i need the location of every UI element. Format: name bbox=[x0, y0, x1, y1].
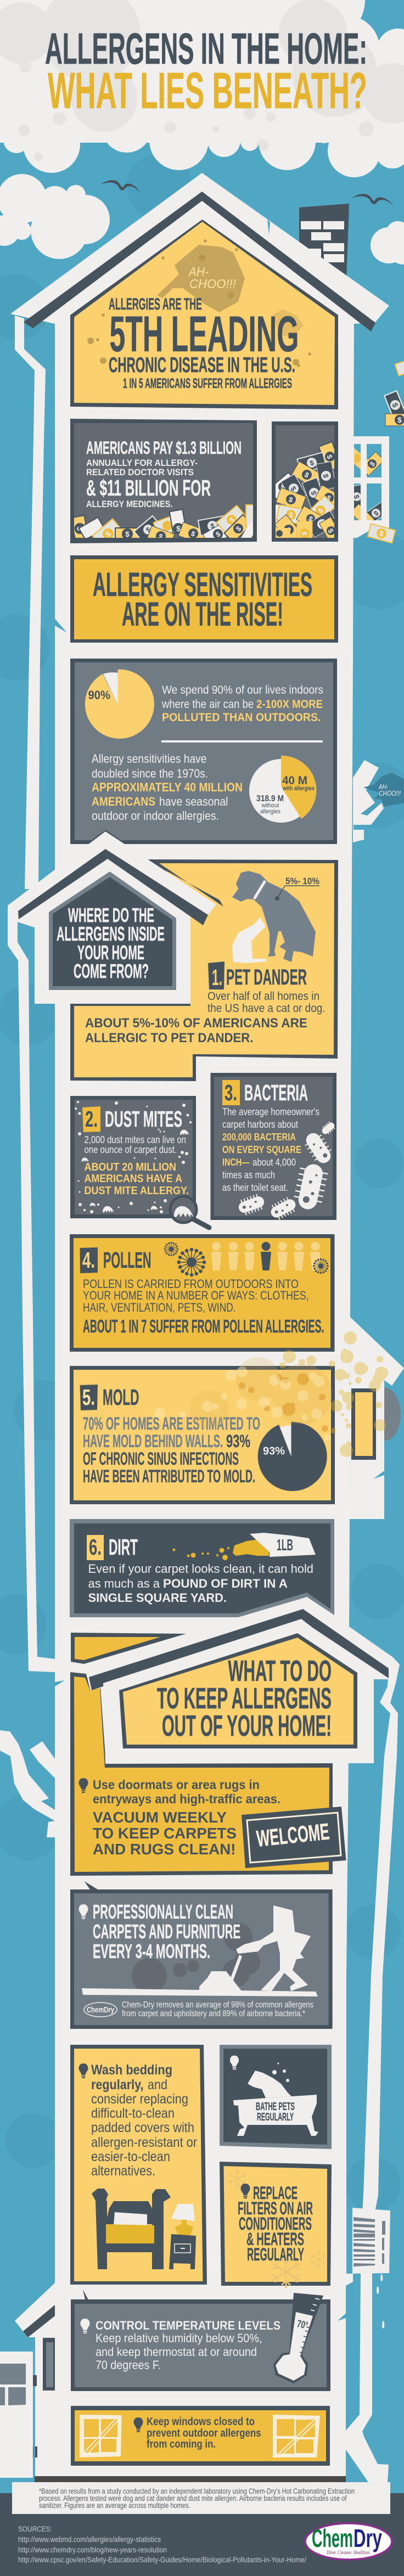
sensitivities text: have seasonal bbox=[159, 795, 228, 808]
icon: welcome mat: WELCOME bbox=[255, 1818, 330, 1852]
footnote card bbox=[12, 2482, 390, 2514]
pie: 93 percent: 93% bbox=[263, 1446, 285, 1458]
cleaning heading: EVERY 3-4 MONTHS. bbox=[93, 1940, 210, 1962]
sources list: http://www.cpsc.gov/en/Safety-Education/Safety-Guides/Home/Biological-Pollutants-in-Your-Home/ bbox=[18, 2555, 306, 2564]
lower left annex bbox=[0, 2283, 55, 2478]
bedding text: easier-to-clean bbox=[91, 2149, 170, 2164]
annex window bbox=[0, 2352, 37, 2478]
logo: chem-dry bbox=[305, 2523, 392, 2560]
house outline: left strip lower bbox=[8, 905, 55, 1672]
footer band bbox=[0, 2493, 404, 2576]
chem-dry claim: from carpet and upholstery and 89% of airborne bacteria.* bbox=[122, 2009, 305, 2018]
icon: dirt bag: 1LB bbox=[277, 1537, 293, 1554]
icon: lightbulb bbox=[79, 1778, 88, 1793]
bacteria text bbox=[222, 1106, 319, 1193]
sneeze text bbox=[188, 265, 237, 291]
bathe pets label bbox=[256, 2101, 295, 2123]
sensitivities text: outdoor or indoor allergies. bbox=[92, 809, 219, 823]
doormat text bbox=[93, 1778, 280, 1858]
mite icons bbox=[82, 1130, 189, 1213]
sources list: SOURCES: bbox=[18, 2524, 52, 2533]
filters text: REPLACE bbox=[253, 2183, 298, 2203]
house foundation bbox=[35, 2476, 346, 2483]
icon: lightbulb bbox=[79, 1904, 88, 1919]
mold text bbox=[83, 1414, 260, 1486]
mold text: OF CHRONIC SINUS INFECTIONS bbox=[83, 1449, 239, 1469]
mini house text: WHERE DO THE bbox=[68, 904, 154, 926]
house outline: what to do roof white bbox=[55, 1597, 393, 1763]
dust mites text: AMERICANS HAVE A bbox=[85, 1173, 182, 1185]
panel: pollen bbox=[70, 1234, 335, 1352]
mini house: where do the allergens bbox=[8, 831, 216, 1004]
windows text bbox=[147, 2416, 261, 2450]
people icons: 1 in 7 bbox=[211, 1242, 321, 1270]
icon: window left bbox=[80, 2415, 122, 2457]
panel: money pile: $ bbox=[284, 526, 293, 534]
bathe pets label: REGULARLY bbox=[257, 2111, 294, 2123]
money pile: $ bbox=[158, 532, 165, 541]
badge: number 2: 2. bbox=[85, 1106, 98, 1132]
filters text: REGULARLY bbox=[247, 2245, 304, 2264]
blue spike by mold window bbox=[373, 1471, 384, 1479]
panel: money pile: $ bbox=[288, 495, 295, 504]
icon: lightbulb bbox=[230, 2056, 239, 2069]
sneezing arm bbox=[353, 760, 404, 842]
panel: bathe pets bbox=[220, 2045, 332, 2149]
window with escaping money: $ bbox=[368, 459, 377, 468]
dirt text: as much as a bbox=[88, 1577, 160, 1590]
bacteria text: 200,000 BACTERIA bbox=[222, 1132, 296, 1143]
panel: money pile: $ bbox=[288, 510, 294, 520]
dust mites text: 2,000 dust mites can live on bbox=[85, 1134, 186, 1145]
dust mites text: one ounce of carpet dust. bbox=[85, 1144, 177, 1155]
mold text: HAVE BEEN ATTRIBUTED TO MOLD. bbox=[83, 1466, 255, 1486]
mini house: what to do bbox=[89, 1609, 389, 1763]
badge: number 5: 5. bbox=[82, 1385, 95, 1410]
headline text bbox=[109, 295, 299, 391]
badge: number 6: 6. bbox=[89, 1534, 102, 1560]
flying bills: $ bbox=[397, 415, 402, 424]
icon: lightbulb bbox=[80, 2319, 90, 2333]
dust mites text bbox=[85, 1134, 189, 1197]
heading: mold: MOLD bbox=[103, 1385, 139, 1410]
doormat text: VACUUM WEEKLY bbox=[93, 1809, 227, 1826]
cloud: top banner bbox=[0, 0, 404, 177]
logo: chem-dry small: ChemDry bbox=[87, 2005, 114, 2015]
bacteria text: INCH— bbox=[222, 1157, 249, 1168]
bedding text: and bbox=[148, 2077, 167, 2093]
panel: 5th leading gable bbox=[70, 220, 338, 409]
flying bills: $ bbox=[378, 528, 385, 538]
sources list: http://www.webmd.com/allergies/allergy-statistics bbox=[18, 2535, 161, 2544]
money pile: $ bbox=[104, 529, 113, 539]
dirt text bbox=[88, 1562, 313, 1605]
window with escaping money: $ bbox=[352, 494, 361, 500]
pollen spores bbox=[164, 1242, 206, 1276]
panel: mold bbox=[70, 1366, 335, 1504]
mini house text: ALLERGENS INSIDE bbox=[57, 923, 165, 945]
mini house text: COME FROM? bbox=[74, 960, 149, 982]
icon: dirt bag bbox=[250, 1533, 316, 1557]
blue spike by temperature panel bbox=[338, 2313, 346, 2321]
mini roof band bbox=[18, 849, 208, 925]
bedding text: Wash bedding bbox=[91, 2062, 172, 2078]
icon: bath bubbles bbox=[272, 2062, 289, 2082]
panel: bacteria bbox=[211, 1073, 336, 1220]
annex roof band bbox=[23, 2305, 55, 2337]
filters text bbox=[238, 2183, 313, 2264]
pet dander text: the US have a cat or dog. bbox=[207, 1002, 325, 1015]
panel: money pile: $ bbox=[325, 453, 334, 460]
icon: lightbulb bbox=[240, 2184, 250, 2198]
indoor pollution text: We spend 90% of our lives indoors bbox=[162, 683, 323, 696]
indoor pollution text: where the air can be bbox=[161, 698, 254, 711]
pie: 90 percent bbox=[85, 670, 154, 739]
dust mites text: DUST MITE ALLERGY. bbox=[85, 1185, 189, 1197]
pie: 90 percent: 90% bbox=[88, 688, 110, 702]
mold text: 70% OF HOMES ARE ESTIMATED TO bbox=[83, 1414, 260, 1433]
heading: dirt: DIRT bbox=[109, 1534, 138, 1560]
panel: pet dander bbox=[70, 859, 338, 1081]
house outline: right strip bbox=[362, 1657, 400, 2212]
chimney bbox=[299, 204, 349, 280]
panel: money pile: $ bbox=[321, 473, 330, 479]
badge: number 4: 4. bbox=[82, 1247, 95, 1273]
temperature text bbox=[96, 2319, 280, 2372]
pollen spore small bbox=[313, 1258, 329, 1274]
cloud shading bbox=[0, 0, 404, 161]
panel: keep windows closed bbox=[71, 2406, 330, 2466]
pollen text: YOUR HOME IN A NUMBER OF WAYS: CLOTHES, bbox=[83, 1289, 308, 1302]
sensitivities text: Allergy sensitivities have bbox=[92, 752, 206, 766]
logo: chem-dry small bbox=[84, 2003, 117, 2017]
mold spores bbox=[154, 1331, 388, 1457]
bacteria text: about 4,000 bbox=[252, 1157, 296, 1168]
cost text: ANNUALLY FOR ALLERGY- bbox=[86, 458, 198, 468]
small splat bbox=[273, 309, 304, 338]
badge: number 3: 3. bbox=[225, 1080, 237, 1105]
pet dander text bbox=[85, 989, 325, 1045]
cost text bbox=[86, 438, 242, 509]
splat dots bbox=[87, 239, 311, 367]
badge: number 6 bbox=[87, 1534, 104, 1560]
annex door bbox=[43, 2338, 55, 2391]
house body bbox=[55, 316, 354, 2478]
panel: money pile: $ bbox=[307, 514, 315, 524]
panel: money pile: $ bbox=[289, 485, 298, 493]
icon: lightbulb bbox=[79, 2063, 88, 2078]
sneeze text: AH- bbox=[188, 265, 209, 279]
pet dander text: ALLERGIC TO PET DANDER. bbox=[85, 1031, 254, 1045]
mini house text: YOUR HOME bbox=[77, 941, 144, 964]
panel: replace filters bbox=[220, 2162, 332, 2288]
money pile: $ bbox=[210, 521, 216, 531]
bedding text: alternatives. bbox=[91, 2163, 155, 2179]
panel: indoor air statistics bbox=[70, 659, 337, 844]
pie: 93 percent bbox=[258, 1422, 327, 1491]
cost text: ALLERGY MEDICINES. bbox=[86, 499, 172, 509]
cloud: right bbox=[371, 221, 404, 265]
money pile: $ bbox=[214, 530, 222, 539]
house outline: left strip upper bbox=[15, 316, 46, 889]
badge: number 1 bbox=[208, 961, 225, 990]
doormat text: AND RUGS CLEAN! bbox=[93, 1841, 236, 1858]
panel: money pile bbox=[272, 421, 338, 542]
filters text: & HEATERS bbox=[246, 2229, 304, 2249]
birds bbox=[100, 180, 394, 207]
money pile: $ bbox=[190, 529, 197, 538]
bedding text: padded covers with bbox=[91, 2120, 194, 2135]
bedding text bbox=[91, 2062, 197, 2179]
mini house plate bbox=[119, 1633, 357, 1748]
mold text: 93% bbox=[226, 1431, 250, 1451]
panel: dust mites bbox=[70, 1096, 196, 1218]
house outline: left ribbon bbox=[0, 1730, 55, 1837]
filters text: CONDITIONERS bbox=[239, 2214, 312, 2234]
panel: money pile: $ bbox=[325, 493, 333, 503]
bacteria icons bbox=[237, 1121, 336, 1219]
panel: money pile: $ bbox=[318, 520, 327, 529]
logo: chem-dry: Chem bbox=[312, 2524, 353, 2552]
panel: money pile: $ bbox=[309, 458, 315, 468]
panel: dirt bbox=[70, 1519, 334, 1617]
bedding text: consider replacing bbox=[91, 2091, 188, 2107]
window with escaping money bbox=[354, 436, 389, 538]
temperature text: and keep thermostat at or around bbox=[96, 2345, 257, 2359]
icon: dog in tub bbox=[233, 2071, 318, 2136]
sensitivities text bbox=[92, 752, 243, 823]
icon: lightbulb bbox=[134, 2417, 143, 2432]
money pile: $ bbox=[75, 526, 85, 531]
cloud: left bbox=[0, 174, 110, 259]
pie: 40 million: allergies bbox=[260, 808, 280, 815]
money pile: $ bbox=[176, 524, 181, 533]
chem-dry claim: Chem-Dry removes an average of 98% of common allergens bbox=[122, 2000, 313, 2010]
pie: 40 million: with allergies bbox=[282, 785, 315, 792]
pie: 40 million: 318.9 M bbox=[256, 794, 284, 803]
window with escaping money: $ bbox=[372, 509, 380, 518]
dirt text: SINGLE SQUARE YARD. bbox=[88, 1591, 227, 1605]
cleaning heading: PROFESSIONALLY CLEAN bbox=[93, 1900, 233, 1923]
gray oval behind mold window bbox=[370, 1388, 401, 1441]
dog collar bbox=[254, 881, 265, 899]
cost text: AMERICANS PAY $1.3 BILLION bbox=[86, 438, 242, 458]
panel: wash bedding bbox=[70, 2045, 207, 2285]
indoor pollution text: 2-100X MORE bbox=[256, 698, 323, 711]
indoor pollution text: POLLUTED THAN OUTDOORS. bbox=[162, 711, 321, 724]
house body upper side blue spike bbox=[54, 617, 67, 633]
pie: 40 million: without bbox=[261, 802, 279, 809]
doormat text: TO KEEP CARPETS bbox=[93, 1825, 237, 1842]
money pile: $ bbox=[125, 530, 130, 538]
money pile: $ bbox=[144, 525, 153, 534]
icon: thermometer: 70° bbox=[296, 2318, 309, 2332]
roof crack bbox=[267, 220, 270, 235]
cost text: RELATED DOCTOR VISITS bbox=[86, 468, 194, 477]
panel: money pile: $ bbox=[300, 531, 308, 536]
heading: dust mites: DUST MITES bbox=[105, 1106, 182, 1132]
bedding text: difficult-to-clean bbox=[91, 2106, 175, 2121]
logo: chem-dry: Dry bbox=[354, 2524, 382, 2552]
headline text: ALLERGIES ARE THE bbox=[109, 295, 202, 313]
pie: 40 million: 40 M bbox=[282, 774, 307, 787]
sneeze text bbox=[378, 783, 401, 797]
roof dark band bbox=[24, 192, 375, 331]
illustration: man with vacuum bbox=[82, 1905, 318, 1996]
sneeze splat bbox=[157, 245, 245, 312]
sensitivities text: APPROXIMATELY 40 MILLION bbox=[92, 780, 243, 794]
dirt text: POUND OF DIRT IN A bbox=[163, 1577, 288, 1590]
pollen text bbox=[83, 1277, 324, 1336]
bacteria text: The average homeowner's bbox=[222, 1106, 319, 1117]
dirt text: Even if your carpet looks clean, it can hold bbox=[88, 1562, 313, 1576]
sneeze text: AH- bbox=[378, 783, 389, 791]
heading: pollen: POLLEN bbox=[103, 1247, 152, 1273]
windows text: Keep windows closed to bbox=[147, 2416, 255, 2428]
chem-dry claim bbox=[122, 2000, 313, 2018]
sources list: http://www.chemdry.com/blog/new-years-resolution bbox=[18, 2545, 167, 2554]
doormat text: entryways and high-traffic areas. bbox=[93, 1792, 280, 1806]
icon: cat bbox=[232, 918, 267, 963]
sneeze text: CHOO!!! bbox=[189, 277, 237, 291]
notch gable on stats panel bbox=[92, 830, 121, 844]
bedding text: allergen-resistant or bbox=[91, 2135, 197, 2150]
filters text: FILTERS ON AIR bbox=[238, 2198, 313, 2218]
panel: cost of allergies bbox=[70, 419, 258, 549]
pie: 40 million bbox=[249, 756, 316, 823]
snowflake icons bbox=[228, 2169, 326, 2288]
footnote card: sanitizer. Figures are an average across multiple homes. bbox=[39, 2501, 190, 2510]
blue spike near mini house bbox=[55, 1680, 65, 1686]
roof band top right bbox=[145, 859, 223, 907]
icon: magnifier bbox=[170, 1196, 209, 1228]
bedding text: regularly, bbox=[91, 2077, 144, 2093]
dark blotches bbox=[132, 1923, 260, 1993]
bacteria text: as their toilet seat. bbox=[222, 1182, 288, 1193]
pollen text: POLLEN IS CARRIED FROM OUTDOORS INTO bbox=[83, 1277, 299, 1291]
panel: professional cleaning bbox=[70, 1881, 333, 2029]
badge: number 1: 1. bbox=[212, 965, 222, 990]
heading: bacteria: BACTERIA bbox=[244, 1080, 308, 1105]
pet dander text: Over half of all homes in bbox=[207, 989, 319, 1003]
icon: welcome mat bbox=[242, 1807, 346, 1868]
flying bills: $ bbox=[390, 401, 400, 409]
icon: nightstand lamp bbox=[169, 2204, 196, 2269]
window: mold side bbox=[351, 1388, 376, 1460]
pet allergy label: 5%- 10% bbox=[285, 876, 319, 886]
bacteria text: carpet harbors about bbox=[222, 1119, 298, 1130]
temperature text: 70 degrees F. bbox=[96, 2358, 161, 2372]
panel: control temperature bbox=[71, 2290, 330, 2391]
bacteria text: ON EVERY SQUARE bbox=[222, 1144, 301, 1155]
panel: allergy sensitivities banner bbox=[70, 555, 338, 643]
icon: thermometer bbox=[273, 2293, 323, 2383]
sources list bbox=[18, 2524, 306, 2564]
windows text: from coming in. bbox=[147, 2438, 216, 2450]
panel: doormats bbox=[70, 1633, 346, 1876]
sensitivities text: AMERICANS bbox=[92, 795, 155, 808]
air vent bbox=[352, 2208, 390, 2274]
icon: window right bbox=[273, 2415, 320, 2457]
money pile: $ bbox=[234, 524, 243, 533]
panel: money pile: $ bbox=[279, 482, 288, 491]
panel: money pile: $ bbox=[303, 470, 311, 480]
pollen text: HAIR, VENTILATION, PETS, WIND. bbox=[83, 1301, 236, 1314]
mini house plate bbox=[49, 871, 176, 990]
icon: bed bbox=[92, 2189, 171, 2269]
cleaning heading bbox=[93, 1900, 240, 1962]
mold text: HAVE MOLD BEHIND WALLS. bbox=[83, 1431, 223, 1451]
icon: dog bbox=[232, 871, 316, 962]
panel: money pile: $ bbox=[309, 490, 318, 497]
dirt spill bbox=[172, 1539, 269, 1560]
sensitivities text: doubled since the 1970s. bbox=[92, 767, 208, 780]
heading: pet dander: PET DANDER bbox=[226, 965, 307, 989]
money pile: $ bbox=[228, 515, 236, 524]
bathe pets label: BATHE PETS bbox=[256, 2101, 295, 2113]
indoor pollution text bbox=[161, 683, 323, 724]
doormat text: Use doormats or area rugs in bbox=[93, 1778, 260, 1792]
dust mites text: ABOUT 20 MILLION bbox=[85, 1161, 176, 1173]
title bbox=[45, 24, 367, 119]
panel: money pile: $ bbox=[316, 506, 326, 515]
pet allergy label bbox=[275, 876, 319, 901]
bacteria text: times as much bbox=[222, 1169, 275, 1180]
money pile bbox=[74, 504, 253, 538]
mini house text bbox=[57, 904, 165, 982]
flying bills bbox=[368, 357, 404, 543]
house extension: right side bbox=[350, 1317, 404, 1519]
pet dander text: ABOUT 5%-10% OF AMERICANS ARE bbox=[85, 1016, 307, 1031]
sneeze splat bbox=[363, 773, 404, 807]
sky blotches bbox=[0, 154, 404, 2212]
water drops and drain pipe bbox=[345, 2273, 389, 2482]
cost text: & $11 BILLION FOR bbox=[86, 475, 211, 500]
dust specks bbox=[75, 1101, 192, 1213]
banner heading bbox=[93, 566, 312, 633]
panel: money pile: $ bbox=[326, 527, 335, 535]
cleaning heading: CARPETS AND FURNITURE bbox=[93, 1920, 240, 1943]
temperature text: CONTROL TEMPERATURE LEVELS bbox=[96, 2319, 280, 2332]
logo: chem-dry: Drier. Cleaner. Healthier. bbox=[327, 2550, 371, 2555]
heading: what to do bbox=[157, 1655, 332, 1742]
main roof bbox=[10, 173, 389, 331]
windows text: prevent outdoor allergens bbox=[147, 2427, 261, 2439]
temperature text: Keep relative humidity below 50%, bbox=[96, 2331, 262, 2345]
